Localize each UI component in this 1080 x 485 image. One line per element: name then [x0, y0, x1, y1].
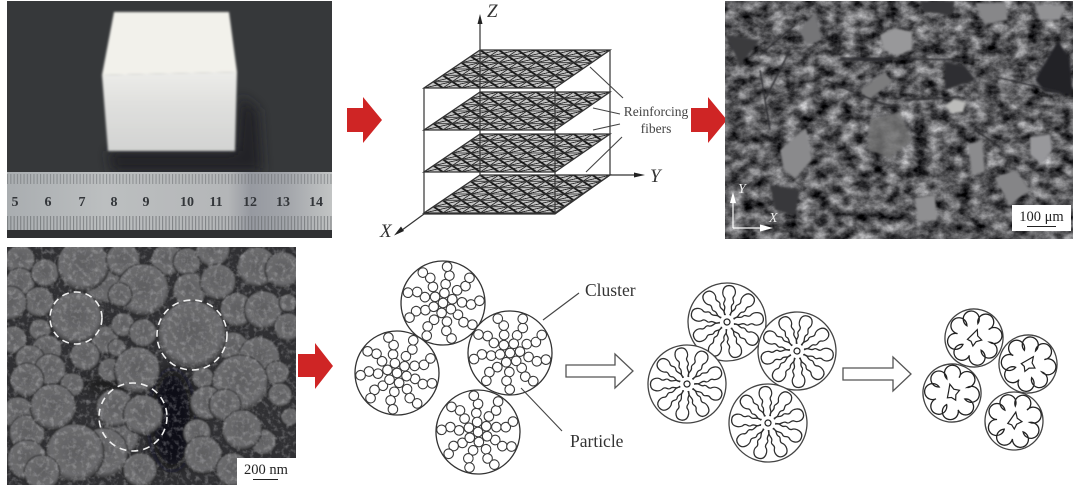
axis labels: Y	[650, 166, 663, 187]
label: reinforcing fibers: fibers	[641, 121, 671, 136]
diagram: clusters of discrete particles	[347, 256, 565, 478]
photo: white ceramic block on ruler	[7, 1, 332, 238]
ruler numbers: 7	[78, 195, 86, 210]
arrow: hollow, second sintering step	[843, 357, 911, 391]
cube frame	[424, 50, 610, 214]
diagram: layered reinforcing fibers	[379, 1, 688, 242]
dark voids	[725, 1, 1073, 215]
label: cluster with leader: Cluster	[585, 280, 636, 300]
ruler numbers: 5	[12, 195, 18, 210]
ruler numbers: 13	[276, 195, 290, 210]
light flakes	[780, 3, 1065, 222]
mesh layers	[424, 50, 610, 213]
axis labels: X	[379, 221, 393, 242]
photo: SEM fracture surface with fibers	[725, 1, 1073, 239]
ruler numbers: 9	[142, 195, 150, 210]
label: reinforcing fibers: Reinforcing	[624, 104, 688, 119]
ruler numbers: 14	[309, 195, 323, 210]
label: particle with leader	[521, 388, 624, 451]
axes overlay	[730, 192, 773, 232]
arrow: red, layup to fracture surface	[691, 97, 727, 143]
block shadow	[108, 96, 262, 172]
photo: SEM particle clusters	[0, 233, 302, 485]
fibers	[760, 25, 1060, 147]
blobs	[0, 233, 302, 485]
axis labels	[379, 1, 663, 242]
ruler numbers: 11	[209, 195, 223, 210]
arrow: hollow, first sintering step	[566, 354, 633, 388]
ruler	[7, 172, 332, 238]
axis labels: Z	[487, 1, 498, 22]
label: cluster with leader	[543, 280, 636, 320]
axes labels: X	[768, 211, 778, 226]
scale bar: 100 um: 100 μm	[1019, 209, 1064, 225]
axes labels: Y	[738, 182, 748, 197]
arrow: red, SEM to cluster model	[298, 343, 333, 389]
ruler numbers: 12	[243, 195, 257, 210]
leader lines	[586, 67, 623, 172]
label: reinforcing fibers	[624, 104, 688, 136]
white block	[102, 12, 237, 151]
ruler numbers: 10	[180, 195, 194, 210]
dashed circles	[50, 292, 227, 451]
diagram: densified clusters	[915, 302, 1068, 452]
scale bar: 200 nm: 200 nm	[244, 462, 289, 478]
ruler numbers: 8	[110, 195, 118, 210]
ruler numbers: 6	[44, 195, 52, 210]
diagram: clusters with necked particles	[642, 280, 846, 465]
axes	[394, 14, 645, 236]
axes labels	[738, 184, 778, 222]
scale bar: 100 um	[1012, 205, 1071, 231]
ruler numbers	[12, 197, 323, 206]
scale bar: 200 nm	[237, 458, 296, 485]
label: particle with leader: Particle	[570, 431, 624, 451]
arrow: red, block to layup	[347, 97, 382, 143]
